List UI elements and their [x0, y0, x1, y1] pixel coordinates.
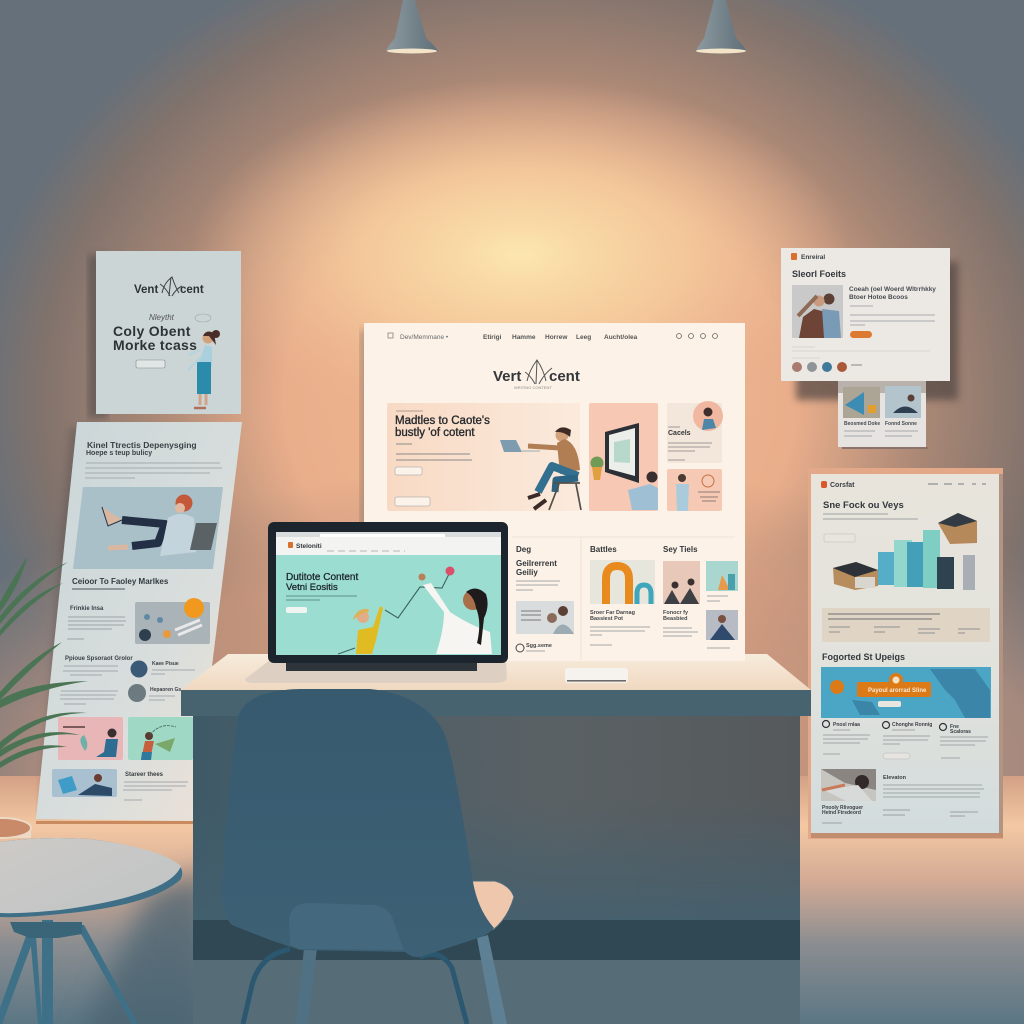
column deg: Sgg.seme	[526, 643, 552, 649]
site nav: Aucht/olea	[604, 334, 638, 341]
woman figure	[188, 330, 220, 408]
chair seat	[470, 881, 514, 930]
yellow figure	[353, 606, 383, 654]
hero card: Madtles to Caote's	[395, 415, 490, 427]
site nav: Hamme	[512, 334, 536, 341]
hero card	[387, 403, 581, 511]
poster: right tall: Fogorted St Upeigs	[822, 652, 905, 662]
laptop hero	[276, 555, 501, 655]
side card bottom	[667, 469, 722, 511]
card: pink figure	[58, 717, 123, 760]
poster: top left brand: Nleytht	[149, 313, 175, 322]
wall background	[0, 0, 1024, 780]
growth line	[338, 572, 450, 654]
card: green figure	[128, 717, 193, 760]
table legs	[0, 920, 138, 1024]
column battles: Battles	[590, 545, 617, 554]
column deg	[516, 545, 574, 652]
round table	[0, 838, 182, 1024]
column sey tiels	[663, 545, 738, 648]
ceiling lamp right	[696, 0, 746, 54]
site nav: Etirigi	[483, 334, 502, 341]
desk	[181, 654, 811, 960]
photo strip: Hetnd Ftrsdeord	[822, 810, 861, 816]
avatars	[60, 660, 195, 704]
feature columns: Pnosl rnlaa	[833, 722, 860, 728]
phone on desk	[565, 668, 628, 683]
column deg: Geiliy	[516, 568, 538, 577]
poster: top left brand: cent	[180, 284, 204, 296]
poster: top right: Sleorl Foeits	[792, 269, 846, 279]
poster: tall left: Hoepe s teup bulicy	[86, 450, 152, 457]
central website panel	[360, 323, 745, 661]
plant pot	[0, 818, 31, 838]
column deg: Geilrerrent	[516, 559, 557, 568]
world map banner: Payoul arorrad Sline	[868, 688, 927, 694]
browser bar	[276, 532, 501, 551]
poster: right tall	[808, 468, 1003, 839]
site logo: Vert	[493, 368, 521, 385]
poster: right tall: Sne Fock ou Veys	[823, 500, 904, 511]
plant	[0, 557, 88, 768]
info band	[822, 608, 990, 642]
table top	[0, 838, 182, 917]
chair handle cut-out	[289, 903, 404, 950]
poster: tall left: Kinel Ttrectis Depenysging	[87, 440, 197, 450]
poster: top left brand	[88, 251, 241, 418]
site nav: Horrew	[545, 334, 568, 341]
column sey tiels: Beasbied	[663, 616, 687, 622]
small poster under top right	[838, 381, 928, 449]
column deg: Deg	[516, 545, 531, 554]
ceiling lamp left	[386, 0, 438, 54]
feature columns	[822, 720, 988, 759]
feature columns: Scaloras	[950, 729, 971, 735]
feature columns: Fne	[950, 724, 959, 730]
illustration: reclining woman	[73, 487, 223, 569]
panel: gadgets	[135, 598, 210, 644]
poster: top right: Coeah (oel Woerd Wltrrhkky	[849, 286, 936, 293]
laptop	[245, 522, 508, 683]
floor	[0, 776, 1024, 1024]
poster: tall left	[36, 422, 242, 824]
column sey tiels: Fonocr fy	[663, 610, 689, 616]
man with laptop	[500, 427, 581, 510]
small poster under top right: Beosmed Doke	[844, 421, 880, 427]
column battles: Bassiest Pot	[590, 616, 623, 622]
side card top: Cacels	[668, 430, 691, 437]
site nav: Leeg	[576, 334, 591, 341]
laptop base	[245, 660, 507, 683]
site logo: cent	[549, 368, 580, 385]
feature columns: Chonghe Ronnig	[892, 722, 932, 728]
photo strip	[821, 769, 984, 823]
column battles: Sroer Far Darnag	[590, 610, 635, 616]
card: laptop figure	[52, 769, 117, 797]
laptop hero: Vetni Eositis	[286, 582, 338, 593]
poster: top right	[781, 248, 958, 400]
poster: top left brand: Morke tcass	[113, 337, 197, 353]
browser bar: Steloniti	[296, 543, 322, 550]
poster: top right: Btoer Hotoe Bcoos	[849, 294, 908, 301]
divider	[512, 537, 735, 660]
chair	[222, 689, 514, 1024]
site logo	[493, 360, 580, 390]
social icons	[792, 362, 862, 372]
chair back	[222, 689, 494, 957]
photo strip: Pnooly Rlivoguer	[822, 805, 863, 811]
poster: right tall: Corsfat	[830, 482, 855, 489]
poster: tall left: Ppioue Spsoraot Grolor	[65, 656, 133, 662]
poster: top right: Enreiral	[801, 254, 825, 261]
site logo: WRITING CONTENT	[514, 385, 552, 390]
side card top	[667, 401, 723, 463]
laptop hero: Dutitote Content	[286, 572, 358, 583]
column battles	[590, 545, 655, 645]
woman figure	[418, 574, 492, 654]
column sey tiels: Sey Tiels	[663, 545, 698, 554]
small poster under top right: Fonnd Sonne	[885, 421, 917, 427]
avatars: Kaee Pisue	[152, 661, 179, 667]
hero card: bustly 'of cotent	[395, 427, 475, 439]
world map banner	[821, 667, 991, 718]
couple photo	[792, 285, 843, 338]
3D bar chart	[833, 513, 977, 590]
poster: top left brand: Vent	[134, 284, 158, 296]
photo strip: Elevaton	[883, 775, 907, 781]
avatars: Hepaoren Gs	[150, 687, 181, 693]
site nav: Dev/Memmane •	[400, 334, 449, 341]
tablet card	[589, 403, 658, 511]
poster: tall left: Ceioor To Faoley Marlkes	[72, 577, 169, 586]
poster: tall left: Stareer thees	[125, 772, 164, 778]
site nav	[388, 333, 718, 341]
poster: top left brand: Coly Obent	[113, 323, 191, 339]
chair legs	[243, 935, 507, 1024]
poster: tall left: Frinkie Insa	[70, 606, 104, 612]
